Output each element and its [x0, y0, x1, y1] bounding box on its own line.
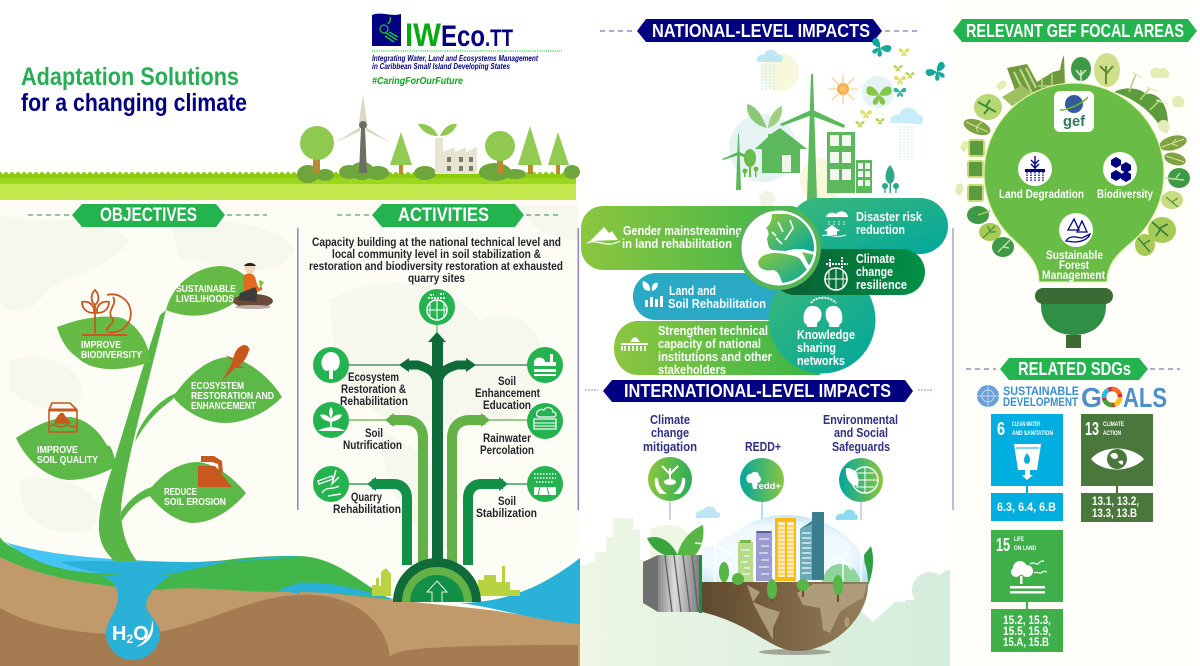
land degradation icon [999, 152, 1084, 201]
activity labels: Restoration & [341, 384, 406, 396]
pill: climate change resilience [772, 249, 925, 295]
international labels: mitigation [643, 439, 697, 454]
bulb shadow [759, 649, 831, 655]
pill: land and soil rehabilitation: Land and [669, 284, 716, 298]
international-level heading: INTERNATIONAL-LEVEL IMPACTS [624, 381, 891, 401]
light blue wave [5, 542, 185, 573]
circle: knowledge sharing networks [768, 266, 876, 374]
leaves [747, 104, 782, 128]
activities text: local community level in soil stabilization & [332, 249, 541, 261]
SDG 6: CLEAN WATER [1012, 421, 1040, 428]
land degradation icon: Land Degradation [999, 189, 1084, 201]
pill: land and soil rehabilitation: Soil Rehabilitation [668, 297, 766, 311]
tree trunk [99, 310, 166, 561]
icon: plant and globe [82, 290, 131, 335]
green haze city background [580, 518, 950, 666]
leaf: ecosystem restoration: RESTORATION AND [191, 390, 274, 402]
SDG logo: DEVELOPMENT [1003, 397, 1078, 409]
ground with water layers [0, 537, 580, 666]
butterflies [856, 37, 950, 128]
tree [1071, 57, 1091, 84]
icon: parrot [222, 345, 250, 381]
IWEco.TT logo: .TT [485, 25, 513, 52]
SDG 15: LIFE [1014, 536, 1024, 543]
impact icon: REDD+: redd+ [755, 481, 781, 491]
leaf: reduce soil erosion [147, 462, 246, 523]
center icon: climate [419, 289, 455, 325]
pale backdrop circles [729, 53, 894, 207]
pill: disaster risk reduction: Disaster risk [856, 210, 922, 224]
leaf: improve biodiversity: IMPROVE [81, 339, 121, 351]
related SDGs heading: RELATED SDGs [1018, 359, 1131, 379]
SDG 6: AND SANITATION [1012, 430, 1053, 437]
blue wedge [277, 583, 300, 594]
activity labels: Education [483, 400, 531, 412]
pill: strengthen technical capacity: Strengthen technical [658, 324, 768, 338]
tree [1094, 53, 1120, 87]
turbines on hill [1114, 72, 1168, 126]
leaf: sustainable livelihoods: SUSTAINABLE [176, 283, 236, 295]
related SDGs heading [966, 358, 1180, 380]
UN emblem [977, 385, 999, 407]
pill: gender mainstreaming: in land rehabilitation [622, 237, 732, 251]
green hill [0, 537, 400, 620]
SDG 13 [1081, 414, 1153, 522]
SDG 13: CLIMATE [1103, 421, 1124, 428]
icon: soil enhancement [527, 347, 563, 383]
international labels: Environmental [823, 412, 898, 427]
activity labels: Rehabilitation [333, 504, 401, 516]
bushes [297, 162, 580, 183]
title: for a changing climate [21, 89, 247, 117]
house [755, 128, 807, 173]
grass strip [0, 174, 576, 200]
icon: farmer [233, 262, 273, 309]
pill: climate change resilience: Climate [856, 252, 895, 266]
leaf: improve soil quality [16, 417, 115, 480]
pill: gender mainstreaming [581, 206, 811, 270]
SDG 15: ON LAND [1014, 545, 1036, 552]
leaf: reduce soil erosion: SOIL EROSION [164, 496, 226, 508]
impact icon: climate change mitigation [648, 457, 692, 501]
international labels: REDD+ [745, 439, 781, 454]
targets: 15.2, 15.3, [1003, 615, 1051, 627]
wind turbine [335, 94, 391, 173]
title: Adaptation Solutions [21, 63, 239, 91]
pine tree [548, 132, 569, 174]
leaf: reduce soil erosion: REDUCE [164, 486, 197, 498]
glass bulb top [703, 515, 868, 582]
arch base with arrow [393, 558, 481, 602]
icon: soil nutrification [313, 402, 349, 438]
objectives heading: OBJECTIVES [100, 205, 197, 226]
pill: gender mainstreaming: Gender mainstreaming [623, 224, 742, 238]
SDG 15 [991, 530, 1063, 652]
logo flag icon [372, 14, 401, 46]
icon: soil quality [49, 403, 77, 432]
water drop with H2O [100, 575, 172, 660]
sustainable forest icon: Sustainable [1046, 250, 1103, 262]
earth half [702, 582, 868, 651]
world map watermark [0, 205, 578, 550]
activities heading [337, 204, 558, 227]
targets: 13.1, 13.2, [1092, 496, 1139, 508]
circle: knowledge sharing networks: networks [797, 354, 845, 368]
objectives tree [16, 262, 282, 561]
activities text: quarry sites [408, 273, 465, 285]
small trees [742, 149, 758, 177]
right water [460, 558, 580, 624]
leaf: ecosystem restoration: ENHANCEMENT [191, 400, 256, 412]
pill: strengthen technical capacity: institutions and other [658, 350, 772, 364]
arrows: central dark [399, 332, 476, 565]
leaf: improve soil quality: SOIL QUALITY [37, 454, 98, 466]
SDG colour wheel [1104, 389, 1120, 405]
icon: tree and birds [1010, 561, 1047, 594]
sustainable forest icon: Management [1042, 270, 1105, 282]
lime city silhouette [372, 566, 520, 596]
screw base [643, 555, 702, 613]
water drop with H2O: 2 [126, 632, 133, 646]
SDG logo: G [1081, 382, 1102, 413]
building: yellow [775, 518, 796, 581]
impact icon: environmental safeguards [839, 458, 883, 502]
light bulb city [643, 506, 880, 655]
activity labels: Soil [365, 428, 383, 440]
GEF bulb decoration [955, 53, 1190, 257]
SDG 15: 15 [996, 535, 1010, 555]
icon: water glass [1014, 444, 1041, 480]
cloud left [696, 506, 720, 518]
SDG 6 [991, 414, 1063, 521]
building: purple [756, 531, 772, 581]
activity labels: Ecosystem [348, 372, 399, 384]
activity labels: Nutrification [343, 440, 402, 452]
cloud right [836, 509, 858, 520]
national-level heading: NATIONAL-LEVEL IMPACTS [652, 21, 870, 41]
objectives heading [28, 204, 267, 227]
impact icon: REDD+ [740, 458, 784, 502]
tree [485, 131, 515, 174]
building: blue [800, 512, 824, 580]
IWEco.TT logo: Integrating Water, Land and Ecosystems Management [372, 54, 538, 63]
icon: eye globe [1091, 448, 1144, 470]
globe [737, 206, 821, 290]
pine tree [390, 132, 412, 174]
leaf: improve biodiversity: BIODIVERSITY [81, 349, 142, 361]
SDG 6: 6 [997, 419, 1005, 439]
wind turbine large [780, 74, 845, 200]
water drop with H2O: O [133, 623, 149, 645]
activity labels: Percolation [480, 445, 534, 457]
targets: 15.5, 15.9, [1003, 626, 1051, 638]
pill: disaster risk reduction [790, 198, 948, 254]
national-level heading [600, 19, 918, 42]
clouds [1150, 68, 1169, 78]
tan soil [0, 557, 580, 666]
teal tree [882, 165, 899, 193]
biodiversity icon: Biodiversity [1097, 189, 1154, 201]
SDG logo [977, 382, 1167, 413]
small trees [719, 562, 843, 602]
activities text [309, 237, 563, 285]
national eco illustration [722, 37, 950, 207]
activity labels: Quarry [351, 492, 382, 504]
international labels: Climate [650, 412, 690, 427]
tree [300, 126, 334, 174]
targets [991, 609, 1063, 652]
factory [418, 124, 477, 174]
biodiversity icon [1097, 152, 1154, 201]
rain cloud left [757, 50, 783, 90]
targets: 15.A, 15.B [1003, 637, 1049, 649]
activity labels: Rainwater [483, 433, 531, 445]
pill: climate change resilience: change [856, 265, 893, 279]
column rules [297, 228, 954, 510]
national impacts cluster [581, 198, 948, 377]
international labels: Safeguards [832, 439, 890, 454]
left water [295, 582, 397, 600]
leaf: ecosystem restoration: ECOSYSTEM [191, 380, 244, 392]
background hill [822, 564, 862, 582]
leaf: sustainable livelihoods [166, 266, 252, 316]
activities heading: ACTIVITIES [398, 205, 489, 226]
activity labels: Stabilization [476, 508, 537, 520]
IWEco.TT logo [372, 14, 562, 87]
pill: strengthen technical capacity [614, 321, 820, 377]
circle: knowledge sharing networks: Knowledge [797, 328, 855, 342]
leaf: ecosystem restoration [173, 357, 282, 423]
solar panels [968, 140, 984, 201]
building: green [738, 540, 753, 582]
activity labels: Rehabilitation [340, 396, 408, 408]
icon: ecosystem restoration [313, 347, 349, 383]
icon: erosion [198, 456, 232, 487]
activities arrow tree [313, 289, 563, 602]
bulb base [1035, 288, 1113, 348]
pill: strengthen technical capacity: capacity of national [658, 337, 761, 351]
leaf: improve biodiversity [57, 316, 150, 369]
dark soil [0, 595, 578, 666]
pill: disaster risk reduction: reduction [856, 223, 905, 237]
GEF logo [1054, 91, 1094, 132]
international labels: change [651, 425, 689, 440]
title [21, 63, 247, 117]
IWEco.TT logo: in Caribbean Small Island Developing States [372, 62, 510, 71]
icon: rainwater percolation [527, 403, 563, 439]
arrows: mid light green [385, 413, 490, 565]
buildings [827, 132, 872, 193]
international labels [643, 412, 898, 454]
SDG 13: 13 [1085, 419, 1099, 439]
sustainable forest icon: Forest [1059, 260, 1089, 272]
leaves left [961, 94, 1014, 257]
activity labels: Enhancement [475, 388, 540, 400]
wind turbine small [722, 134, 754, 190]
activities text: restoration and biodiversity restoration at exhausted [309, 261, 563, 273]
leaves right [1135, 133, 1190, 256]
water drop with H2O: H [112, 623, 126, 645]
arrows: outer dark green [367, 477, 508, 565]
rain cloud right [890, 108, 923, 160]
sustainable forest icon [1042, 213, 1105, 282]
international labels: and Social [834, 425, 888, 440]
GEF bulb [984, 83, 1164, 348]
landscape illustration [297, 94, 580, 183]
activity labels: Soil [498, 496, 516, 508]
targets: 6.3, 6.4, 6.B [997, 500, 1056, 514]
circle: knowledge sharing networks: sharing [797, 341, 836, 355]
tree branches [104, 393, 176, 522]
distant turbines [695, 515, 880, 582]
IWEco.TT logo: IW [405, 17, 442, 53]
icon: soil stabilization [527, 466, 563, 502]
GEF logo: gef [1063, 113, 1086, 130]
pill: strengthen technical capacity: stakeholders [658, 363, 726, 377]
buildings [1002, 55, 1065, 106]
IWEco.TT logo: #CaringForOurFuture [372, 75, 463, 87]
SDG logo: SUSTAINABLE [1003, 386, 1079, 398]
connector lines [349, 325, 528, 484]
leaf: improve soil quality: IMPROVE [37, 444, 78, 456]
pill: climate change resilience: resilience [856, 278, 907, 292]
leaves behind bulb [647, 525, 873, 590]
targets: 13.3, 13.B [1092, 508, 1137, 520]
activity labels: Soil [498, 376, 516, 388]
targets [1081, 493, 1153, 522]
activity labels [333, 372, 540, 520]
leaf: sustainable livelihoods: LIVELIHOODS [176, 293, 234, 305]
SDG 13: ACTION [1103, 430, 1121, 437]
pine tree [518, 126, 542, 174]
pill: land and soil rehabilitation [633, 273, 803, 320]
activities text: Capacity building at the national technical level and [312, 237, 561, 249]
SDG logo: ALS [1123, 382, 1167, 413]
connector stems [670, 501, 861, 532]
IWEco.TT logo: Eco [441, 20, 485, 53]
icon: quarry rehabilitation [313, 466, 349, 502]
sun [828, 74, 858, 104]
